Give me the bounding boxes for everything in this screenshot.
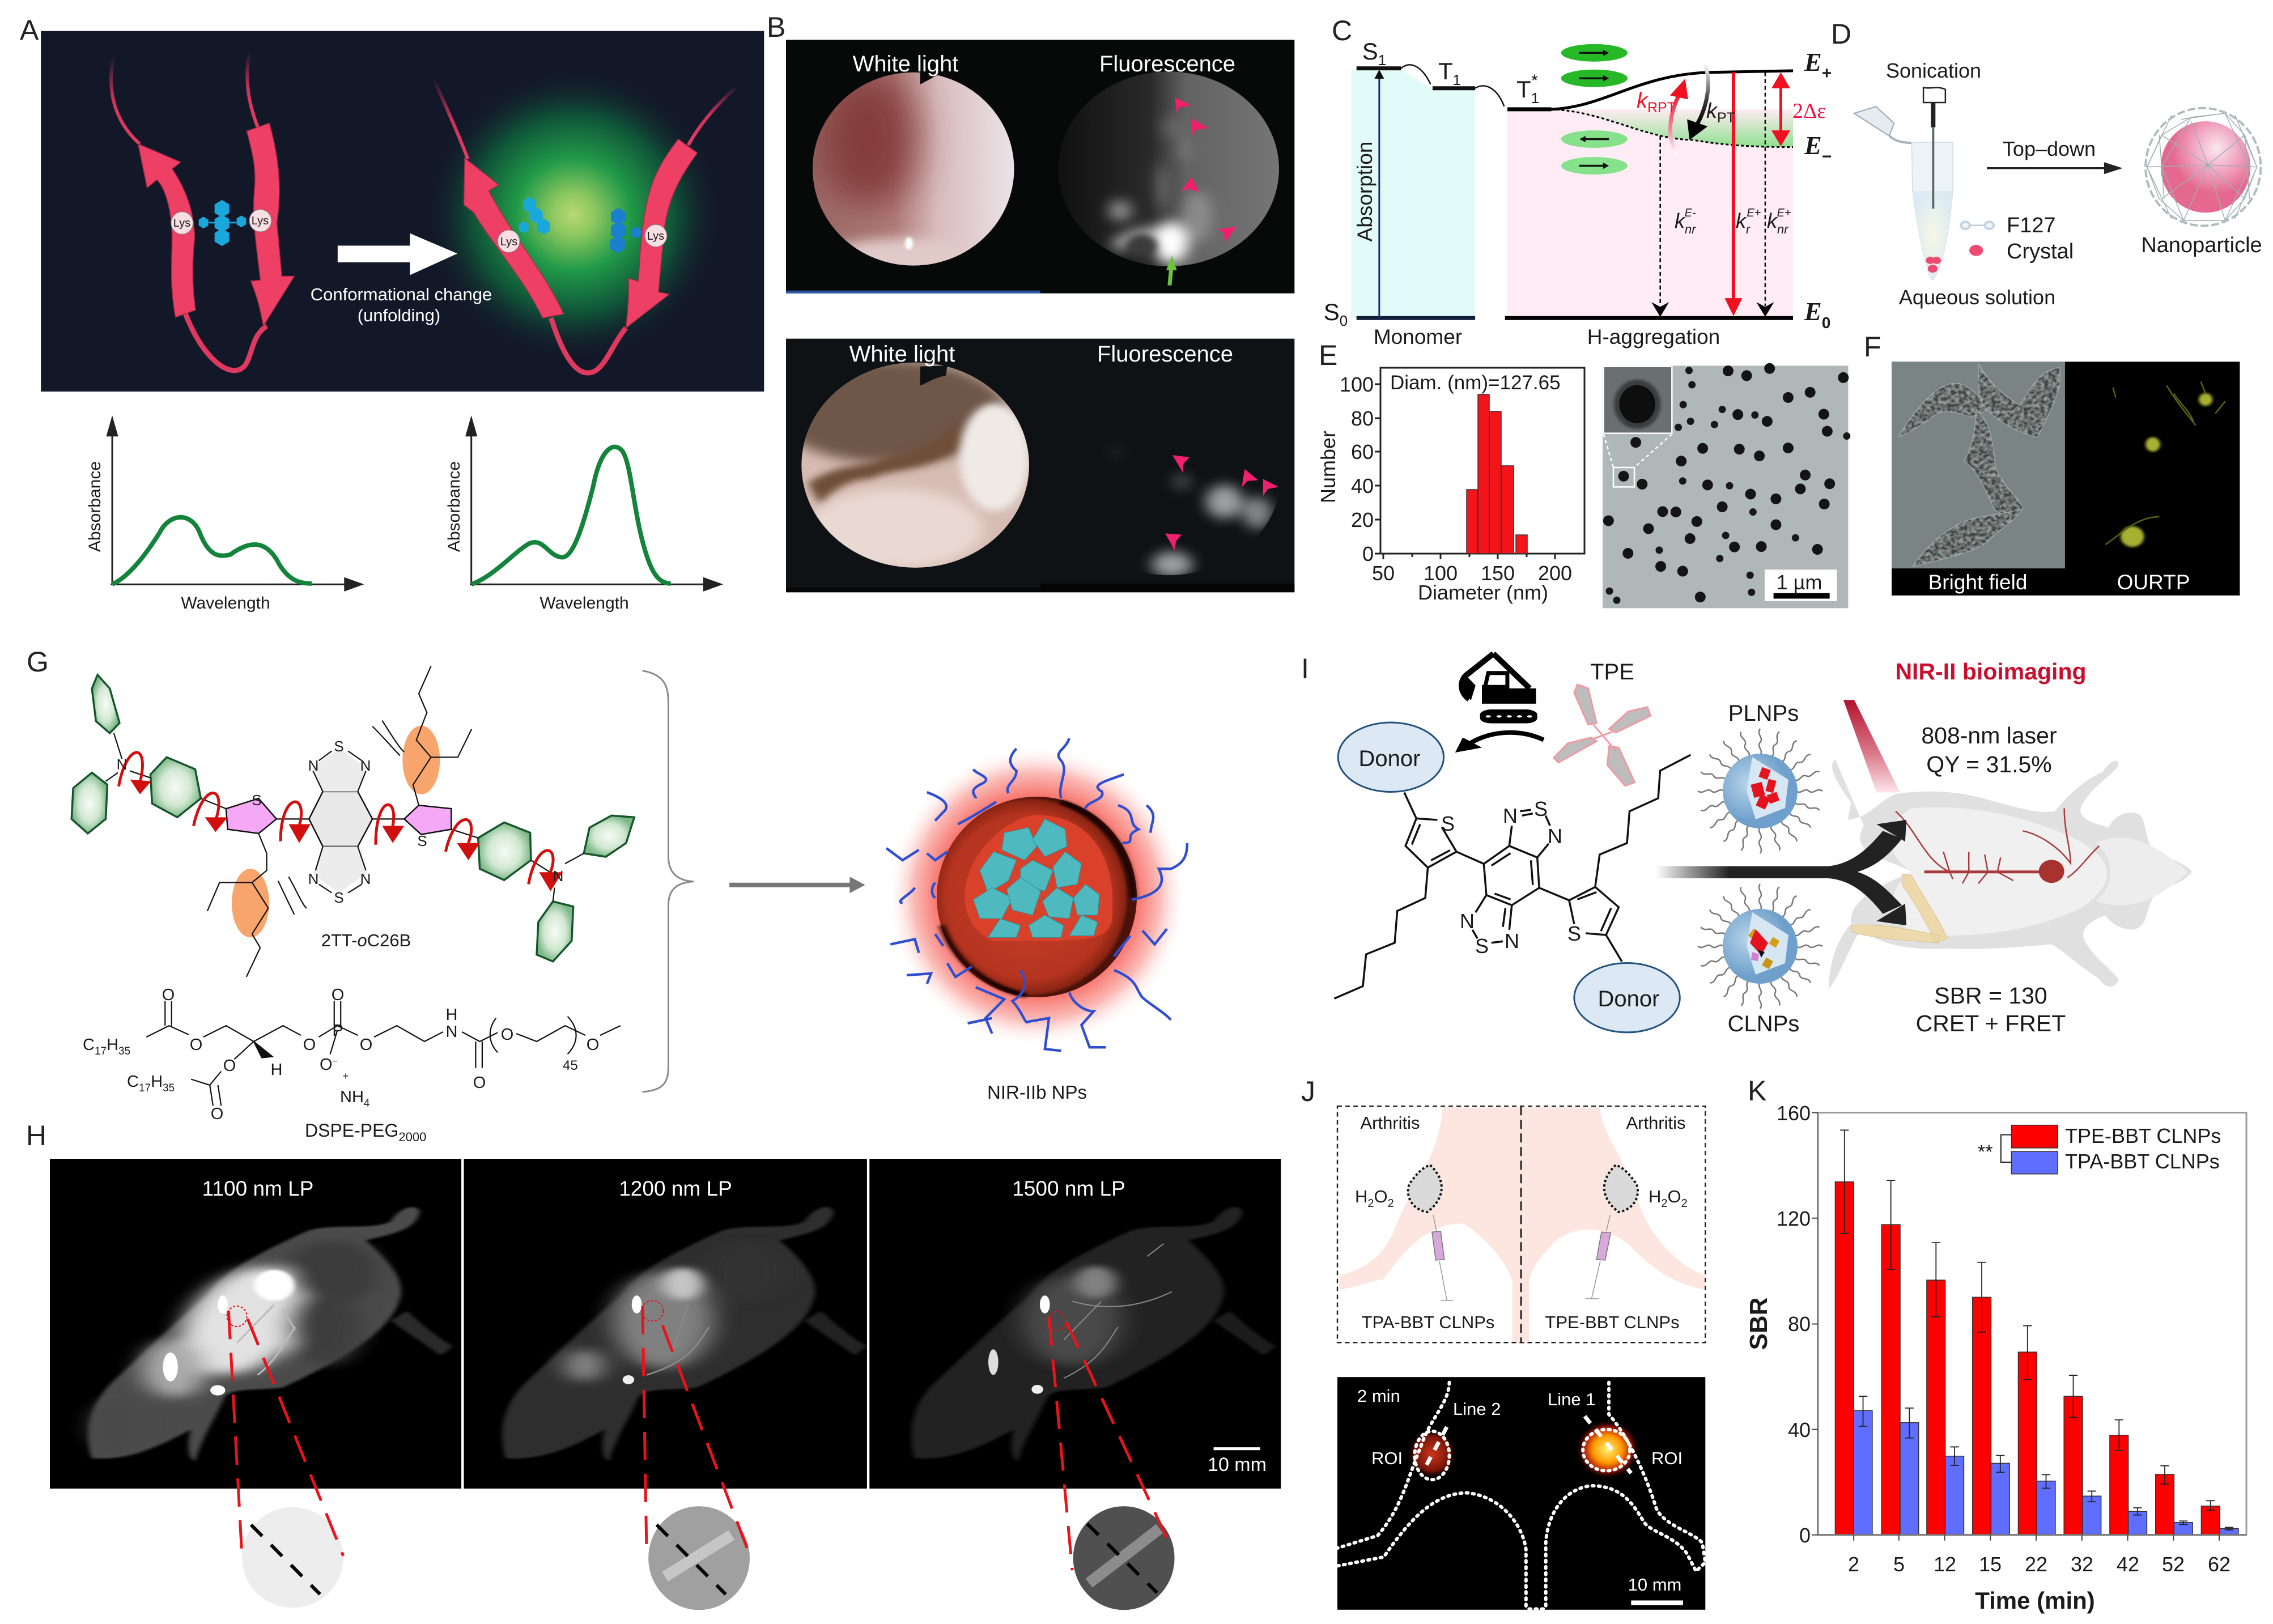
J schematic labels: 2: [1681, 1197, 1688, 1210]
y axis values: [1777, 1102, 1811, 1547]
molecule atoms and name: N: [308, 870, 318, 887]
legend text: TPE-BBT CLNPs: [2065, 1124, 2221, 1147]
molecule atom labels: N: [1505, 929, 1519, 953]
atom labels: O: [501, 1026, 513, 1044]
atom labels: C: [127, 1073, 139, 1091]
molecule atom labels: S: [1441, 812, 1455, 835]
legend text: TPA-BBT CLNPs: [2065, 1150, 2220, 1173]
J image labels: 2 min: [1357, 1386, 1400, 1406]
molecule atoms and name: N: [360, 870, 371, 887]
histogram: Diameter (nm): [1418, 581, 1548, 604]
atom labels: 4: [364, 1098, 370, 1109]
laser and QY text: 808-nm laser: [1921, 722, 2057, 749]
molecule atom labels: S: [1475, 934, 1489, 958]
molecule atoms and name: S: [334, 738, 344, 755]
arrow caption: (unfolding): [358, 305, 440, 325]
histogram: 0: [1362, 542, 1374, 566]
arrow caption: [311, 284, 492, 325]
filter captions: 1200 nm LP: [619, 1177, 732, 1200]
atom labels: 35: [118, 1045, 130, 1057]
chart labels: [86, 461, 629, 613]
Lys labels: [173, 215, 664, 248]
atom labels: O: [360, 1036, 372, 1054]
endoscopy photographs: [774, 40, 1294, 592]
atom labels: C: [83, 1036, 95, 1054]
big branching arrow: [1656, 820, 1906, 925]
SBR and mechanism text: CRET + FRET: [1916, 1010, 2066, 1036]
J image labels: Line 2: [1453, 1399, 1501, 1419]
y axis values: 40: [1788, 1418, 1811, 1442]
bars, error bars and axes: [1812, 1113, 2246, 1541]
x axis values: 22: [2025, 1553, 2047, 1576]
histogram: 150: [1481, 562, 1515, 585]
molecule atoms and name: 2TT-oC26B: [321, 930, 411, 950]
bioimaging title: NIR-II bioimaging: [1895, 658, 2087, 685]
rate constant labels: E+: [1747, 207, 1761, 219]
atom labels: +: [343, 1070, 349, 1082]
histogram: 50: [1372, 562, 1395, 585]
D captions: Aqueous solution: [1899, 286, 2055, 309]
panel: B endoscopy images: [767, 11, 1294, 592]
filter captions: 1500 nm LP: [1012, 1177, 1125, 1200]
level labels: S: [1324, 299, 1340, 325]
histogram: [1316, 368, 1584, 604]
molecule atoms and name: [117, 738, 563, 950]
rate constant labels: k: [1767, 209, 1777, 232]
J schematic labels: Arthritis: [1626, 1113, 1686, 1133]
J schematic labels: TPE-BBT CLNPs: [1545, 1312, 1680, 1332]
rate constant labels: RPT: [1647, 100, 1676, 116]
Lys labels: Lys: [647, 230, 664, 243]
level labels: 1: [1453, 71, 1461, 88]
panel: H whole-body imaging: [26, 1120, 1281, 1610]
F captions: [1928, 571, 2190, 594]
energy labels: E: [1804, 297, 1822, 326]
label C: C: [1332, 15, 1352, 46]
absorption and state captions: Absorption: [1353, 142, 1376, 241]
rate constant labels: 2Δε: [1792, 99, 1826, 123]
donor labels: [1359, 660, 1659, 1011]
J schematic labels: [1355, 1113, 1688, 1332]
rate constant labels: r: [1746, 222, 1751, 236]
J image labels: ROI: [1651, 1448, 1683, 1468]
panel: J arthritis imaging: [1301, 1075, 1705, 1610]
label F: F: [1864, 331, 1881, 363]
axis titles: [1745, 1298, 2095, 1614]
level labels: T: [1516, 76, 1531, 103]
level labels: *: [1531, 71, 1538, 90]
atom labels: O: [190, 1036, 202, 1054]
chart labels: Wavelength: [181, 594, 270, 613]
J schematic labels: O: [1668, 1187, 1681, 1206]
atom labels: H: [446, 1006, 457, 1024]
J schematic labels: 2: [1367, 1197, 1374, 1210]
histogram: 200: [1538, 562, 1572, 585]
image captions: White light: [853, 52, 958, 76]
scale text: 10 mm: [1208, 1454, 1267, 1476]
J image labels: 10 mm: [1628, 1575, 1681, 1595]
panel: E size distribution and TEM: [1316, 339, 1848, 608]
three NIR images with mouse: [50, 1159, 1281, 1610]
level labels: 1: [1378, 52, 1386, 69]
level labels: [1324, 38, 1539, 329]
atom labels: H: [271, 1061, 282, 1079]
level labels: 0: [1340, 312, 1348, 329]
atom labels: O: [320, 1056, 333, 1074]
rate constant labels: [1637, 89, 1826, 236]
panel: G NIR-IIb nanoparticle formulation: [27, 646, 1187, 1144]
atom labels: 35: [163, 1082, 175, 1094]
rate constant labels: nr: [1685, 222, 1697, 236]
laser and QY text: QY = 31.5%: [1926, 751, 2052, 777]
atom labels: 17: [139, 1082, 151, 1094]
D captions: Nanoparticle: [2141, 233, 2262, 257]
x axis values: 52: [2162, 1553, 2185, 1576]
x axis values: 2: [1848, 1553, 1859, 1576]
histogram: 20: [1351, 508, 1374, 532]
molecule atom labels: S: [1534, 797, 1548, 820]
label G: G: [27, 646, 49, 678]
icon: blue molecule folded: [199, 197, 641, 253]
label E: E: [1319, 339, 1337, 371]
atom labels: H: [151, 1073, 163, 1091]
atom labels: O: [332, 986, 344, 1004]
histogram: 40: [1351, 474, 1374, 498]
TEM micrograph: [1603, 365, 1848, 608]
J schematic labels: H: [1649, 1187, 1661, 1206]
sonication tube and nanoparticle drawing: [1854, 87, 2261, 280]
molecule skeleton: [1334, 755, 1690, 998]
donor groups: [1338, 722, 1680, 1032]
mouse anatomy illustration: [1829, 700, 2191, 989]
image captions: [849, 52, 1235, 367]
molecule atoms and name: S: [417, 832, 427, 849]
donor labels: Donor: [1598, 987, 1659, 1011]
bonds: [146, 1001, 621, 1106]
y axis values: 80: [1788, 1312, 1811, 1336]
label I: I: [1301, 653, 1309, 685]
rate constant labels: nr: [1777, 222, 1789, 236]
molecule atoms and name: N: [308, 757, 318, 774]
laser and QY text: [1921, 722, 2057, 777]
molecule atoms and name: S: [334, 889, 344, 906]
absorption and state captions: [1353, 142, 1720, 348]
atom labels: O: [303, 1036, 316, 1054]
caption: NIR-IIb NPs: [987, 1082, 1087, 1103]
monomer levels: [1351, 65, 1504, 318]
J schematic labels: 2: [1661, 1197, 1668, 1210]
absorption and state captions: H-aggregation: [1587, 325, 1720, 348]
atom labels: H: [107, 1036, 118, 1054]
panel: I molecule design and bioimaging: [1301, 653, 2191, 1036]
J image labels: [1357, 1386, 1683, 1595]
D captions: Top–down: [2003, 137, 2096, 160]
panel: K SBR bar chart: [1745, 1075, 2246, 1614]
panel: C energy level diagram: [1324, 15, 1832, 348]
molecule atoms and name: N: [553, 868, 563, 885]
level labels: T: [1438, 58, 1453, 84]
x axis values: 32: [2071, 1553, 2093, 1576]
energy labels: 0: [1822, 314, 1830, 331]
axis titles: Time (min): [1975, 1587, 2095, 1614]
J schematic labels: 2: [1388, 1197, 1394, 1210]
y axis values: 0: [1799, 1524, 1811, 1547]
Lys labels: Lys: [173, 217, 190, 229]
histogram: Diam. (nm)=127.65: [1390, 372, 1561, 394]
rate constant labels: k: [1706, 99, 1717, 123]
label A: A: [20, 14, 39, 46]
atom labels: −: [333, 1057, 338, 1066]
J schematic labels: TPA-BBT CLNPs: [1362, 1312, 1494, 1332]
J schematic labels: O: [1374, 1187, 1388, 1206]
Lys labels: Lys: [500, 236, 517, 248]
chart labels: Wavelength: [539, 594, 629, 613]
rate constant labels: E+: [1777, 207, 1791, 219]
filter captions: [202, 1177, 1125, 1200]
molecule 2TT-oC26B drawing: [71, 666, 634, 977]
D captions: Sonication: [1886, 59, 1981, 82]
dark illustration background with ribbons: [41, 31, 764, 392]
rate constant labels: PT: [1717, 110, 1735, 126]
chart labels: Absorbance: [86, 461, 104, 552]
histogram: 100: [1424, 562, 1458, 585]
absorption and state captions: Monomer: [1374, 325, 1462, 348]
F captions: OURTP: [2117, 571, 2190, 594]
nanoparticle NIR-IIb: [886, 738, 1187, 1051]
name: 2000: [398, 1130, 426, 1144]
image captions: White light: [849, 342, 955, 367]
histogram: Number: [1316, 431, 1340, 503]
panel: D nanoparticle preparation: [1831, 18, 2262, 309]
label D: D: [1831, 18, 1851, 50]
donor labels: Donor: [1359, 746, 1420, 771]
atom labels: N: [446, 1023, 457, 1041]
x axis values: [1848, 1553, 2230, 1576]
J image labels: Line 1: [1548, 1389, 1595, 1409]
panel: F cell images: [1864, 331, 2240, 596]
icon: excavator: [1455, 654, 1651, 786]
schematic of injection: [1337, 1106, 1705, 1342]
legend text: **: [1978, 1141, 1992, 1163]
nanoparticle PLNPs: [1698, 729, 1822, 853]
J image labels: ROI: [1371, 1448, 1403, 1468]
rate constant labels: E-: [1685, 207, 1696, 219]
x axis values: 15: [1979, 1553, 2002, 1576]
y axis values: 120: [1777, 1207, 1811, 1230]
atom labels: P: [332, 1022, 343, 1040]
atom labels: [83, 986, 599, 1123]
SBR and mechanism text: SBR = 130: [1934, 983, 2047, 1009]
panel: A protein unfolding: [20, 14, 764, 613]
molecule atom labels: N: [1503, 804, 1518, 827]
atom labels: O: [223, 1057, 236, 1075]
NP captions: CLNPs: [1728, 1011, 1799, 1036]
Lys labels: Lys: [252, 215, 269, 227]
bright field and OURTP images: [1892, 362, 2240, 596]
energy labels: E: [1804, 48, 1822, 76]
label J: J: [1301, 1075, 1315, 1107]
NP captions: [1728, 701, 1799, 1036]
atom labels: O: [211, 1105, 223, 1123]
fluorescence image: [1337, 1377, 1705, 1610]
rate constant labels: k: [1675, 209, 1685, 232]
nanoparticle CLNPs: [1698, 884, 1822, 1009]
atom labels: 17: [95, 1045, 107, 1057]
atom labels: O: [473, 1074, 486, 1092]
energy labels: +: [1822, 64, 1832, 83]
molecule atom labels: N: [1548, 824, 1562, 848]
filter captions: 1100 nm LP: [202, 1177, 313, 1200]
D captions: Crystal: [2007, 240, 2074, 263]
label H: H: [26, 1120, 46, 1151]
SBR and mechanism text: [1916, 983, 2066, 1036]
molecule atom labels: N: [1460, 909, 1475, 933]
image captions: Fluorescence: [1099, 52, 1235, 76]
energy labels: −: [1822, 147, 1832, 166]
x axis values: 42: [2117, 1553, 2139, 1576]
molecule atoms and name: S: [252, 792, 262, 809]
atom labels: O: [587, 1036, 599, 1054]
atom labels: O: [162, 986, 175, 1004]
F captions: Bright field: [1928, 571, 2027, 594]
histogram: 100: [1340, 373, 1374, 396]
axis titles: SBR: [1745, 1298, 1773, 1350]
molecule atom labels: S: [1567, 922, 1581, 945]
J schematic labels: H: [1355, 1187, 1367, 1206]
molecule atoms and name: N: [360, 757, 371, 774]
legend text: [1978, 1124, 2221, 1173]
J schematic labels: Arthritis: [1360, 1113, 1420, 1133]
y axis values: 160: [1777, 1102, 1811, 1125]
molecule atom labels: [1441, 797, 1581, 958]
x axis values: 5: [1893, 1553, 1905, 1576]
atom labels: NH: [340, 1088, 364, 1106]
energy labels: [1804, 48, 1832, 331]
histogram: 80: [1351, 407, 1374, 430]
rate constant labels: k: [1736, 209, 1746, 232]
histogram: 60: [1351, 440, 1374, 464]
image captions: Fluorescence: [1097, 342, 1233, 367]
rate constant labels: k: [1637, 89, 1647, 113]
molecule DSPE-PEG2000: [83, 986, 621, 1144]
label K: K: [1748, 1075, 1766, 1107]
level labels: 1: [1531, 90, 1539, 107]
x axis values: 62: [2208, 1553, 2230, 1576]
name: DSPE-PEG: [305, 1120, 398, 1141]
donor labels: TPE: [1590, 660, 1634, 685]
molecule atoms and name: N: [117, 756, 127, 773]
H-aggregation levels: [1505, 44, 1793, 318]
level labels: S: [1362, 38, 1378, 65]
label B: B: [767, 11, 785, 43]
energy labels: E: [1804, 131, 1822, 160]
brace and arrow: [643, 671, 865, 1092]
x axis values: 12: [1934, 1553, 1956, 1576]
NP captions: PLNPs: [1728, 701, 1799, 726]
D captions: F127: [2007, 214, 2056, 237]
atom labels: 45: [563, 1058, 578, 1073]
chart labels: Absorbance: [445, 461, 464, 552]
D captions: [1886, 59, 2262, 309]
chart: absorbance before and after: [106, 415, 723, 592]
arrow caption: Conformational change: [311, 284, 492, 304]
scale label: 1 µm: [1777, 571, 1822, 594]
